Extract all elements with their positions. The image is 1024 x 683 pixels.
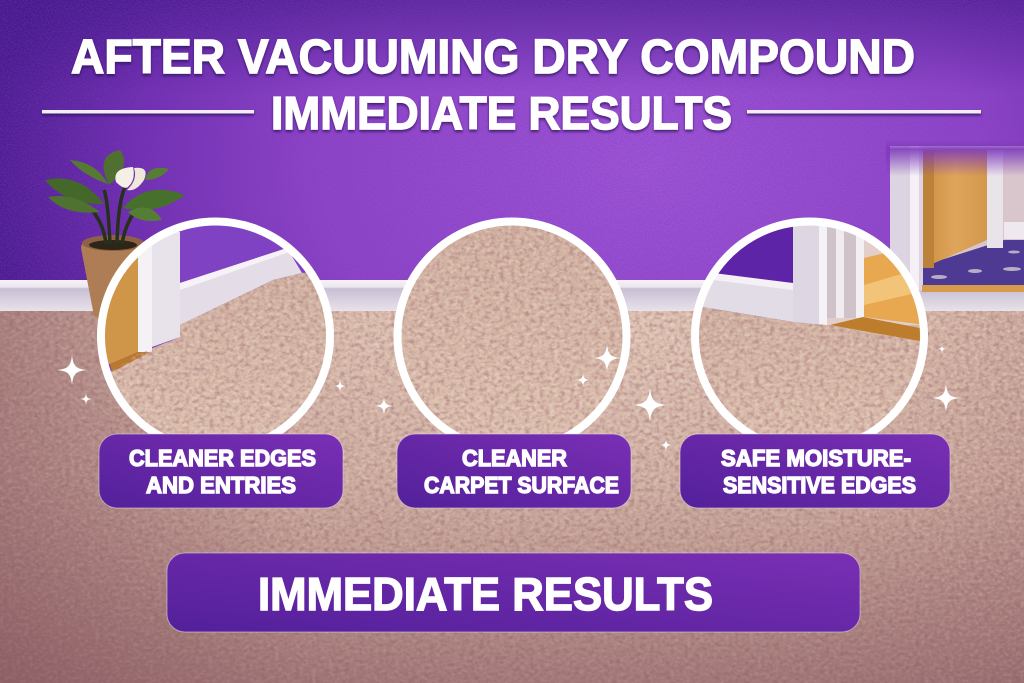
sparkles on carpet xyxy=(57,345,960,451)
banner: immediate results: IMMEDIATE RESULTS xyxy=(258,568,713,620)
banner: immediate results xyxy=(167,553,860,632)
label: cleaner edges and entries: CLEANER EDGES xyxy=(129,445,316,471)
label: safe moisture-sensitive edges: SAFE MOISTURE- xyxy=(721,445,911,471)
subtitle with side rules: IMMEDIATE RESULTS xyxy=(271,87,732,139)
label: cleaner carpet surface xyxy=(397,434,631,508)
magnifier circle: moisture-sensitive edges xyxy=(691,218,928,434)
magnifier circle: edges and entries xyxy=(97,218,334,434)
label: safe moisture-sensitive edges: SENSITIVE EDGES xyxy=(723,472,916,498)
background: carpet floor xyxy=(0,311,1024,683)
baseboard xyxy=(0,280,1024,312)
subtitle with side rules xyxy=(42,87,981,139)
doorway with open door xyxy=(886,140,1024,292)
label: safe moisture-sensitive edges xyxy=(680,434,950,508)
magnifier circle: carpet surface xyxy=(395,220,629,454)
background: purple wall xyxy=(0,0,1024,290)
potted plant xyxy=(45,150,185,321)
label: cleaner edges and entries xyxy=(99,434,343,508)
label: cleaner carpet surface: CARPET SURFACE xyxy=(424,472,619,498)
main title: AFTER VACUUMING DRY COMPOUND xyxy=(71,31,915,84)
label: cleaner carpet surface: CLEANER xyxy=(462,445,567,471)
label: cleaner edges and entries: AND ENTRIES xyxy=(146,472,296,498)
